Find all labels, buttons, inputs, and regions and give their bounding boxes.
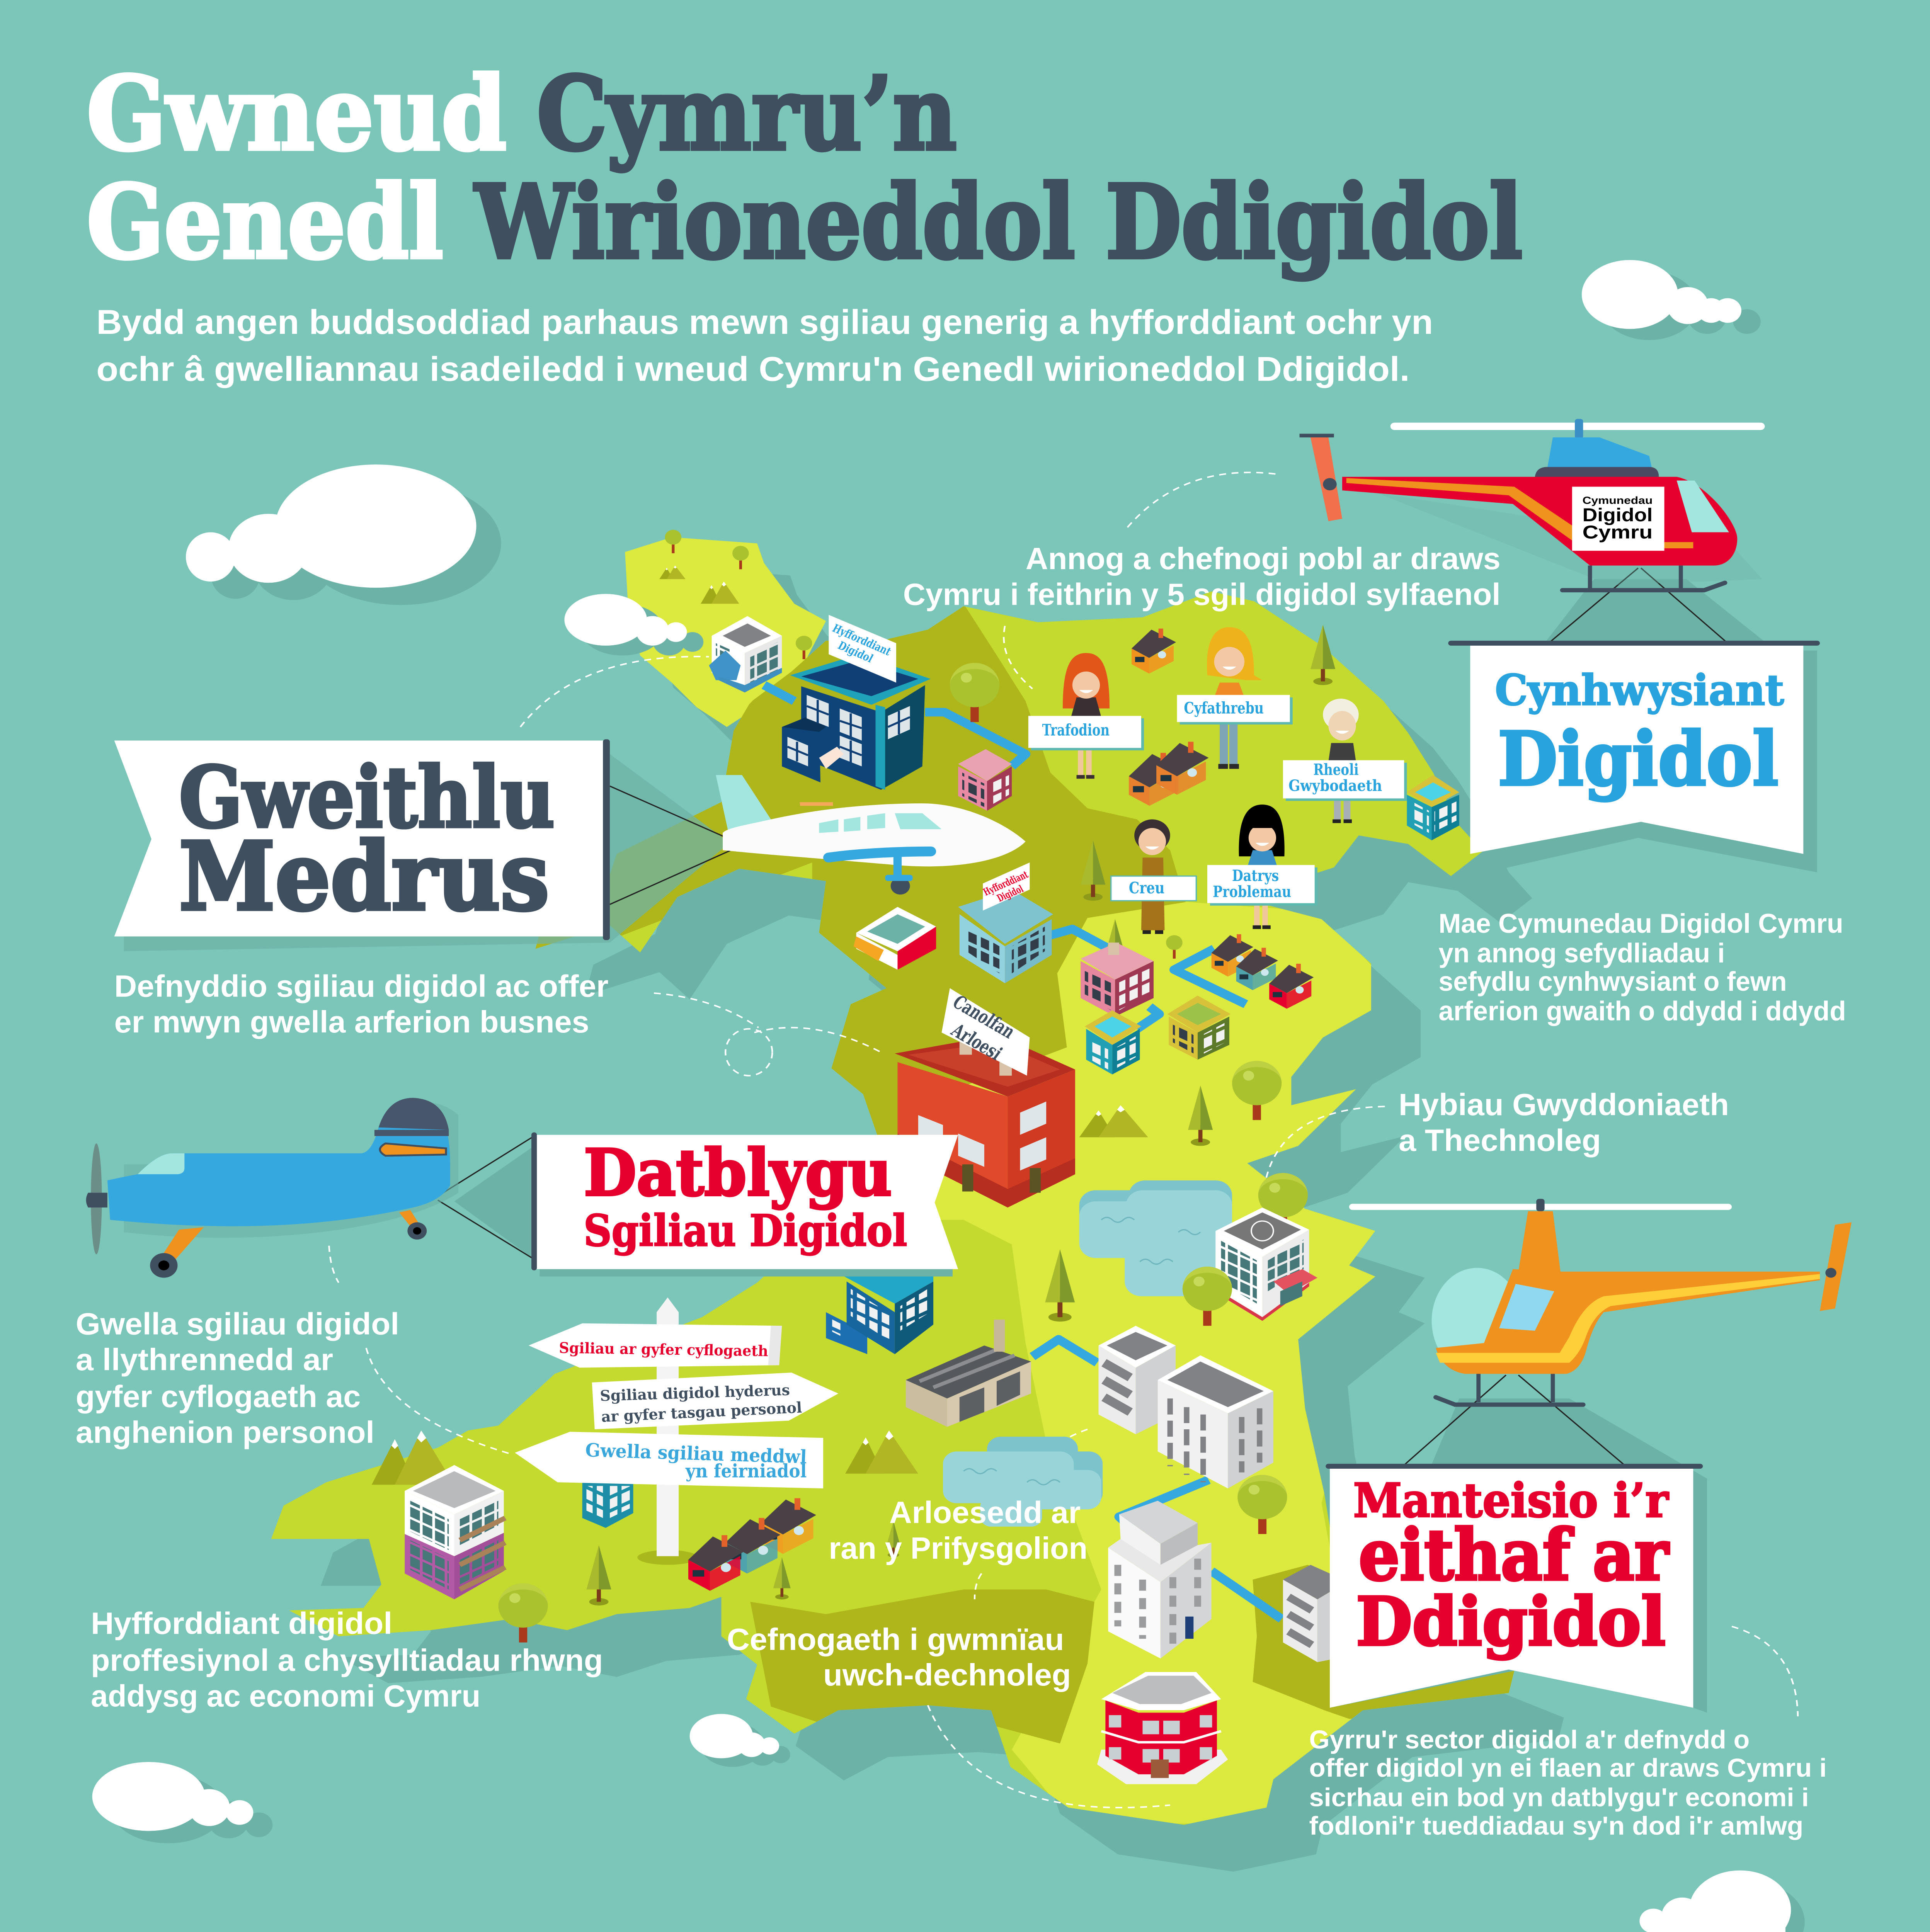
text: Gyrru: offer digidol yn ei flaen ar draws Cymru i [1309,1754,1827,1782]
clouds: lower [92,1714,1805,1932]
banner: Gweithlu Medrus [114,739,734,951]
banner: Manteisio i'r eithaf ar Ddigidol: Ddigidol [1356,1583,1666,1661]
card: Datrys Problemau: Datrys [1232,866,1279,884]
title: Genedl [87,163,443,282]
text: Gyrru [1309,1725,1827,1840]
text: Gwella: gyfer cyflogaeth ac [76,1379,361,1414]
building: teal [1407,775,1459,840]
sign: Canolfan Arloesi [941,988,1030,1076]
banner: Cynhwysiant Digidol: Digidol [1498,716,1779,803]
building: purple and white [405,1465,505,1599]
card: Datrys Problemau: Problemau [1213,883,1291,901]
signpost [515,1298,838,1565]
text: Arloesedd: ran y Prifysgolion [829,1531,1088,1565]
icon: white plane [716,775,1026,895]
sign: Canolfan Arloesi: Canolfan [948,991,1019,1043]
houses: cluster east [1212,934,1314,1009]
card: Datrys Problemau [1207,865,1317,906]
building: Canolfan Arloesi red [895,988,1075,1208]
sign: Gwella sgiliau meddwl: yn feirniadol [685,1460,807,1482]
text: Annog: Cymru i feithrin y 5 sgil digidol sylfaenol [903,577,1501,612]
text: Mae Cymunedau: Mae Cymunedau Digidol Cymru [1438,908,1843,939]
text: Defnyddio [114,969,608,1039]
building: light blue with sign [958,862,1053,983]
mountains and trees [372,530,1335,1605]
text: Defnyddio: Defnyddio sgiliau digidol ac offer [114,969,608,1003]
title [87,55,1523,282]
banner: Gweithlu Medrus: Gweithlu [179,748,555,847]
text: Cefnogaeth [727,1622,1071,1692]
cloud: large left [186,464,501,605]
building: pink [958,749,1012,811]
text: Hyfforddiant digidol: addysg ac economi Cymru [91,1679,480,1713]
banner: Manteisio i'r eithaf ar Ddigidol: Manteisio i’r [1353,1473,1669,1528]
house: orange small [1132,629,1176,673]
text: Annog: Annog a chefnogi pobl ar draws [1026,541,1501,576]
building: red hexagonal [1097,1672,1228,1784]
cloud: lower map [690,1714,790,1767]
subtitle: ochr â gwelliannau isadeiledd i wneud Cymru'n Genedl wirioneddol Ddigidol. [96,350,1410,388]
icon: red helicopter [1300,419,1765,590]
building: olive [1168,996,1231,1060]
text: Arloesedd: Arloesedd ar [889,1495,1081,1529]
title: Cymru’n [537,55,957,173]
banner: Manteisio i'r eithaf ar Ddigidol [1326,1375,1707,1713]
banner: Cynhwysiant Digidol: Cynhwysiant [1495,666,1784,715]
text: Mae Cymunedau: arferion gwaith o ddydd i ddydd [1438,996,1846,1026]
text: Cefnogaeth: uwch-dechnoleg [823,1658,1071,1692]
subtitle: Bydd angen buddsoddiad parhaus mewn sgiliau generig a hyfforddiant ochr yn [96,303,1433,342]
banner: Gweithlu Medrus: Medrus [179,821,549,932]
banner: Datblygu Sgiliau Digidol [438,1132,958,1277]
card: Rheoli Gwybodaeth [1283,760,1407,801]
clouds [186,260,1761,655]
text: Gwella: anghenion personol [76,1415,374,1449]
pipes between buildings [764,685,1282,1619]
text: Gwella [76,1306,399,1449]
text: Mae Cymunedau: sefydlu cynhwysiant o fewn [1438,966,1787,997]
sign: Canolfan Arloesi: Arloesi [947,1019,1007,1064]
person: Datrys Problemau [1207,804,1317,929]
building: tall white [1108,1501,1212,1658]
icon: red helicopter: Cymru [1583,522,1653,543]
card: Rheoli Gwybodaeth: Rheoli [1313,760,1359,779]
lake: south [943,1437,1103,1527]
banner: Datblygu Sgiliau Digidol: Datblygu [584,1135,892,1211]
card: Cyfathrebu: Cyfathrebu [1184,699,1264,718]
sign: Hyfforddiant Digidol [829,615,896,683]
text: Arloesedd [829,1495,1088,1565]
icon: red helicopter: Cymunedau [1583,495,1653,507]
text: Hybiau: Hybiau Gwyddoniaeth [1399,1087,1729,1122]
icon: blue plane [86,1098,458,1278]
building: white with blue porch [709,616,782,692]
banner: Manteisio i'r eithaf ar Ddigidol: eithaf ar [1359,1514,1669,1596]
sign: Hyfforddiant Digidol: Digidol [836,639,875,665]
sign: Sgiliau ar gyfer cyflogaeth [529,1323,782,1368]
person: Rheoli Gwybodaeth [1283,699,1407,823]
card: Rheoli Gwybodaeth: Gwybodaeth [1288,776,1382,795]
building: Hyfforddiant Digidol navy [782,615,931,790]
text: Defnyddio: er mwyn gwella arferion busnes [114,1005,589,1039]
cloud: bottom right [1639,1871,1805,1932]
cloud: bottom left [92,1762,272,1843]
title: Gwneud [87,55,507,173]
text: Hyfforddiant digidol: Hyfforddiant digidol [91,1606,392,1640]
sign: Hyfforddiant Digidol red [981,862,1030,911]
person: Creu [1111,820,1196,934]
text: Mae Cymunedau: yn annog sefydliadau i [1438,938,1725,968]
card: Creu [1111,876,1196,901]
icon: red helicopter: Digidol [1583,504,1653,525]
sign: Hyfforddiant Digidol red: Digidol [995,883,1025,904]
icon: orange helicopter [1349,1199,1852,1405]
sign: Hyfforddiant Digidol: Hyfforddiant [830,622,894,658]
card: Cyfathrebu [1177,695,1293,724]
text: Gyrru: fodloni'r tueddiadau sy'n dod i'r amlwg [1309,1812,1803,1840]
factory [906,1320,1031,1427]
text: Gyrru: Gyrru'r sector digidol a'r defnydd o [1309,1725,1750,1754]
sign: Sgiliau digidol hyderus [592,1372,838,1429]
sign: Gwella sgiliau meddwl [515,1432,823,1488]
subtitle [96,303,1433,388]
lake: north [1079,1180,1232,1296]
text: Hyfforddiant digidol: proffesiynol a chysylltiadau rhwng [91,1643,603,1677]
cloud: top right [1582,260,1761,340]
sign: Hyfforddiant Digidol red: Hyfforddiant [981,869,1030,898]
building: grey partial behind banner [1283,1565,1330,1662]
person: Cyfathrebu [1177,627,1293,769]
text: Gwella: Gwella sgiliau digidol [76,1306,399,1341]
text: Annog [903,541,1501,612]
cloud: over Anglesey [564,594,703,655]
card: Trafodion [1028,716,1144,750]
person: Trafodion [1028,653,1144,779]
text: Hybiau: a Thechnoleg [1399,1123,1601,1157]
building: red shop [853,907,936,970]
building: teal lower [1085,1010,1141,1075]
building: grey large [1158,1355,1273,1488]
card: Trafodion: Trafodion [1042,721,1110,740]
text: Gyrru: sicrhau ein bod yn datblygu'r economi i [1309,1783,1809,1812]
building: teal beneath signpost [582,1482,633,1528]
sign: Sgiliau digidol hyderus: ar gyfer tasgau personol [601,1399,803,1425]
building: pink large [1081,942,1154,1017]
dashed route lines [329,473,1798,1808]
building: hospital with helipad [1215,1208,1317,1321]
text: Mae Cymunedau [1438,908,1846,1026]
text: Cefnogaeth: Cefnogaeth i gwmnïau [727,1622,1064,1656]
banner: Cynhwysiant Digidol [1448,568,1820,872]
text: Gwella: a llythrennedd ar [76,1342,333,1377]
sign: Sgiliau digidol hyderus: Sgiliau digidol hyderus [600,1381,790,1405]
houses: south-west row [688,1498,816,1591]
sign: Gwella sgiliau meddwl: Gwella sgiliau meddwl [585,1439,807,1468]
map of Wales [271,537,1564,1872]
card: Creu: Creu [1129,879,1164,897]
text: Hybiau [1399,1087,1729,1157]
sign: Sgiliau ar gyfer cyflogaeth: Sgiliau ar gyfer cyflogaeth [559,1339,768,1360]
building: blue under banner [826,1269,933,1354]
title: Wirioneddol Ddigidol [473,163,1523,282]
houses: orange pair [1129,742,1208,806]
banner: Datblygu Sgiliau Digidol: Sgiliau Digidol [584,1205,907,1256]
text: Hyfforddiant digidol [91,1606,603,1713]
building: grey small [1099,1326,1176,1434]
